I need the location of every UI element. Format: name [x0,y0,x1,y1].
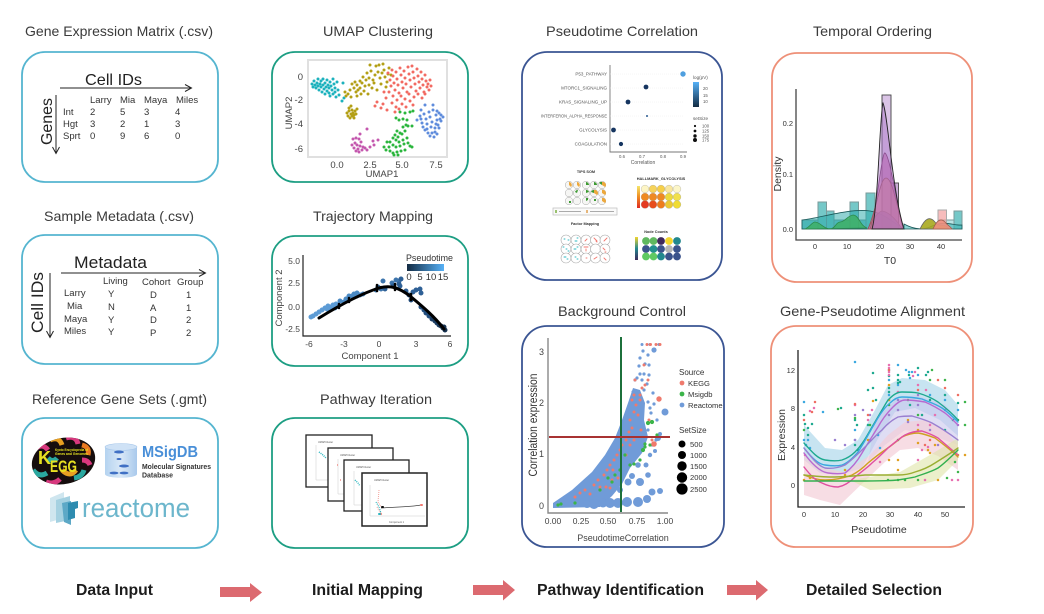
x ticks [802,510,949,519]
chart: node counts: Node Counts [644,230,668,234]
title: background control: Background Control [558,303,686,319]
stage label: pathway identification: Pathway Identification [537,582,704,599]
chart: node counts [635,230,681,260]
x ticks [619,154,687,159]
x ticks: 20 [876,242,884,251]
logo: KEGG: K [38,448,51,468]
plot card 4: Component 1 [389,521,405,524]
expression table: 0 [175,131,180,142]
y ticks: 0 [539,501,544,511]
legend: logp: 15 [703,93,708,98]
y axis ticks: -2.5 [285,324,300,334]
title: gene-pseudotime alignment: Gene-Pseudotime Alignment [780,303,965,319]
x ticks: 20 [859,510,867,519]
legend: logp: 20 [703,86,708,91]
axis label: density: Density [772,156,784,192]
y ticks: 0.0 [783,225,793,234]
arrow: cell IDs vertical [46,273,54,338]
axis label: T0: T0 [884,255,896,267]
legend: pseudotime: 10 [426,272,436,283]
expression table: Int [63,107,74,118]
metadata table: 2 [186,315,191,326]
metadata table: A [150,303,157,314]
title: pseudotime correlation: Pseudotime Correlation [546,23,698,39]
y axis ticks: -2 [295,95,303,106]
x ticks: 50 [941,510,949,519]
x ticks: 30 [906,242,914,251]
legend: set size: 1000 [690,451,707,460]
x ticks: 0.25 [573,516,590,526]
plot card 1: UMAPCluster [318,441,333,444]
x ticks: 0.9 [680,154,687,159]
panel: gene expression matrix [22,23,218,182]
logo: MSigDB: MSigDB [142,444,198,461]
x ticks: 0.00 [545,516,562,526]
y axis ticks [285,256,300,334]
panel: gene-pseudotime alignment [771,303,973,547]
x ticks: 40 [937,242,945,251]
legend: set size: setSize [693,116,709,121]
axis label: expression: Expression [776,409,788,461]
y label: Correlation expression [528,374,540,476]
x axis ticks: 6 [448,339,453,349]
legend: set size: 100 [702,124,710,128]
logo: reactome [50,492,190,525]
metadata table: Cohort [142,277,171,288]
x label: Correlation [631,160,655,166]
pathway labels: MTORC1_SIGNALING [561,86,607,90]
legend: source: Reactome [688,401,723,410]
metadata table: D [150,290,157,301]
arrow: data input to initial mapping [220,583,262,602]
y axis ticks: -4 [295,119,303,130]
expression table: 3 [90,119,95,130]
axis label: UMAP1: UMAP1 [366,169,398,180]
pathway labels [541,72,607,146]
x axis ticks: 2.5 [363,160,377,171]
bubbles [553,344,668,509]
panel: temporal ordering [772,23,972,282]
legend: logp [693,75,708,107]
metadata table: N [108,302,115,313]
expression table: Maya [144,95,168,106]
legend: set size: 175 [702,138,710,142]
expression table: 4 [175,107,180,118]
legend: set size: 125 [702,128,710,134]
metadata table: Mia [67,301,83,312]
x ticks: 0 [813,242,817,251]
chart: UMAP scatter [284,60,447,180]
trajectory points and curve [311,279,445,330]
axis label: pseudotime: Pseudotime [851,524,907,536]
legend: pseudotime [406,253,453,283]
y ticks: 0.1 [783,170,793,179]
y axis ticks: 0 [298,72,303,83]
panel: trajectory mapping [272,208,468,366]
x axis ticks: -3 [340,339,348,349]
chart: hallmark glycolysis [637,176,686,208]
y ticks [787,366,795,490]
legend: pseudotime: Pseudotime [406,253,453,264]
panel: pathway iteration [272,391,468,548]
legend: logp: 10 [703,99,708,104]
logo: KEGG: EGG [50,457,77,476]
y ticks: 8 [791,404,795,413]
stage label: detailed selection: Detailed Selection [806,582,942,599]
chart: factor mapping: Factor Mapping [571,222,600,226]
logo: MSigDB: Molecular Signatures [142,462,211,471]
x ticks: 1.00 [657,516,674,526]
expression table: 3 [144,107,149,118]
y ticks: 12 [787,366,795,375]
histogram bars [802,95,962,229]
pathway dots [611,71,686,146]
title: trajectory mapping: Trajectory Mapping [313,208,433,224]
expression table [63,95,198,142]
pathway labels: COAGULATION [575,142,607,146]
title: sample metadata: Sample Metadata (.csv) [44,208,194,224]
y axis ticks [295,72,303,155]
axis label: metadata: Metadata [74,253,148,272]
legend: set size: 500 [690,440,703,449]
x ticks: 0.50 [600,516,617,526]
title: UMAP clustering: UMAP Clustering [323,23,433,39]
panel: sample metadata [22,208,218,364]
metadata table: Y [108,315,115,326]
expression table: Mia [120,95,136,106]
legend: set size [676,426,707,495]
axis label: component 2: Component 2 [274,269,285,327]
plot card 4 [362,473,427,526]
expression table: 2 [120,119,125,130]
pathway labels: KRAS_SIGNALING_UP [559,100,607,104]
arrow: initial mapping to pathway identification [473,580,515,600]
scatter points [804,362,965,480]
legend: logp: log(pV) [693,75,708,80]
axis label: cell IDs: Cell IDs [85,72,142,89]
pathway labels: INTERFERON_ALPHA_RESPONSE [541,114,607,118]
chart: bubble scatter [528,337,723,543]
x ticks: 40 [914,510,922,519]
expression table: Sprt [63,131,81,142]
metadata table: Maya [64,314,88,325]
axis label: UMAP2: UMAP2 [284,97,295,129]
stacked trajectory plots [306,435,427,526]
legend: set size: 1500 [690,462,707,471]
arrow: genes [52,95,60,154]
expression table: Hgt [63,119,78,130]
expression table: 5 [120,107,125,118]
y ticks: 4 [791,443,795,452]
expression table: 9 [120,131,125,142]
x axis ticks [305,339,453,349]
x label: PseudotimeCorrelation [577,533,669,543]
title: gene expression matrix: Gene Expression Matrix (.csv) [25,23,213,39]
density curves [802,103,962,229]
plot card 2: UMAPCluster [340,454,355,457]
legend: pseudotime: 15 [438,272,448,283]
chart: expression curves [776,350,965,536]
x ticks [813,242,945,251]
metadata table: 1 [186,303,191,314]
y axis ticks: 0.0 [288,302,300,312]
x axis ticks: 0 [377,339,382,349]
metadata table: Miles [64,326,86,337]
axis label: component 1: Component 1 [341,351,399,362]
metadata table: Living [103,276,128,287]
metadata table: D [150,315,157,326]
x axis ticks: 7.5 [429,160,443,171]
chart: hallmark glycolysis: HALLMARK_GLYCOLYSIS [637,176,686,181]
pathway labels: P53_PATHWAY [575,72,607,76]
metadata table: Larry [64,288,86,299]
legend: source: Source [679,368,705,377]
y axis ticks: 2.5 [288,278,300,288]
logo: MSigDB: Database [142,470,173,480]
y axis ticks: 5.0 [288,256,300,266]
legend: source: Msigdb [688,390,712,399]
x ticks: 10 [843,242,851,251]
y ticks: 3 [539,347,544,357]
logo: KEGG: Kyoto Encyclopedia of [55,448,89,452]
logo: KEGG: Genes and Genomes [55,452,88,456]
panel: background control [522,303,724,547]
x ticks: 10 [831,510,839,519]
expression table: 2 [90,107,95,118]
x ticks: 0 [802,510,806,519]
x axis ticks [330,160,443,171]
y ticks: 0.2 [783,119,793,128]
logo: reactome: reactome [82,493,190,523]
stage label: data input: Data Input [76,582,154,599]
clusters [312,64,443,155]
plot card 4: UMAPCluster [374,479,389,482]
title: reference gene sets: Reference Gene Sets (.gmt) [32,391,207,407]
metadata table: 2 [186,328,191,339]
logo: MSigDB [105,444,211,480]
legend: set size: 2500 [690,485,707,494]
legend: set size: 150 [702,134,710,138]
chart: correlation dot plot [541,65,710,166]
stage label: initial mapping: Initial Mapping [312,582,423,599]
title: pathway iteration: Pathway Iteration [320,391,432,407]
x ticks: 0.6 [619,154,626,159]
arrow: cell IDs [60,84,192,92]
logo: KEGG [32,438,96,484]
metadata table: Y [108,289,115,300]
panel: pseudotime correlation [522,23,722,280]
panel: reference gene sets [22,391,218,548]
legend: set size: 2000 [690,473,707,482]
x ticks: 0.8 [660,154,667,159]
legend: set size [693,116,710,142]
y ticks [539,347,544,511]
legend: source [679,368,723,410]
x ticks: 0.7 [639,154,646,159]
threshold: horizontal line [549,436,670,438]
chart: factor mapping [561,222,610,263]
legend: pseudotime: 5 [417,272,423,283]
plot card 3: UMAPCluster [356,466,371,469]
expression table: 0 [90,131,95,142]
chart: TIPS SOM: TIPS SOM [577,170,595,174]
threshold: vertical line [620,337,622,512]
chart: TIPS SOM [553,170,617,215]
axis label: genes: Genes [39,98,56,145]
chart: trajectory [274,253,453,362]
title: temporal ordering: Temporal Ordering [813,23,932,39]
expression table: 3 [175,119,180,130]
expression table: Miles [176,95,198,106]
axis label: cell IDs: Cell IDs [28,272,47,333]
arrow: metadata [61,270,206,276]
y ticks: 0 [791,481,795,490]
fitted curves [804,392,958,487]
panel: UMAP clustering [272,23,468,182]
x ticks: 30 [886,510,894,519]
expression table: 1 [144,119,149,130]
x axis ticks: 5.0 [395,160,409,171]
legend: source: KEGG [688,379,710,388]
y axis ticks: -6 [295,144,303,155]
legend: set size: SetSize [679,426,707,435]
expression table: Larry [90,95,112,106]
confidence ribbons [804,378,958,505]
legend: pseudotime: 0 [406,272,412,283]
x axis ticks: -6 [305,339,313,349]
metadata table: Y [108,327,115,338]
metadata table [64,276,203,339]
y ticks [783,119,793,234]
x axis ticks: 3 [414,339,419,349]
y ticks: 1 [539,449,544,459]
chart: density histogram [772,89,962,267]
x ticks: 0.75 [629,516,646,526]
metadata table: Group [177,277,203,288]
x axis ticks: 0.0 [330,160,344,171]
pathway labels: GLYCOLYSIS [579,128,607,132]
y ticks: 2 [539,398,544,408]
x ticks [545,516,674,526]
metadata table: 1 [186,290,191,301]
arrow: pathway identification to detailed selection [727,580,768,600]
metadata table: P [150,328,156,339]
expression table: 6 [144,131,149,142]
